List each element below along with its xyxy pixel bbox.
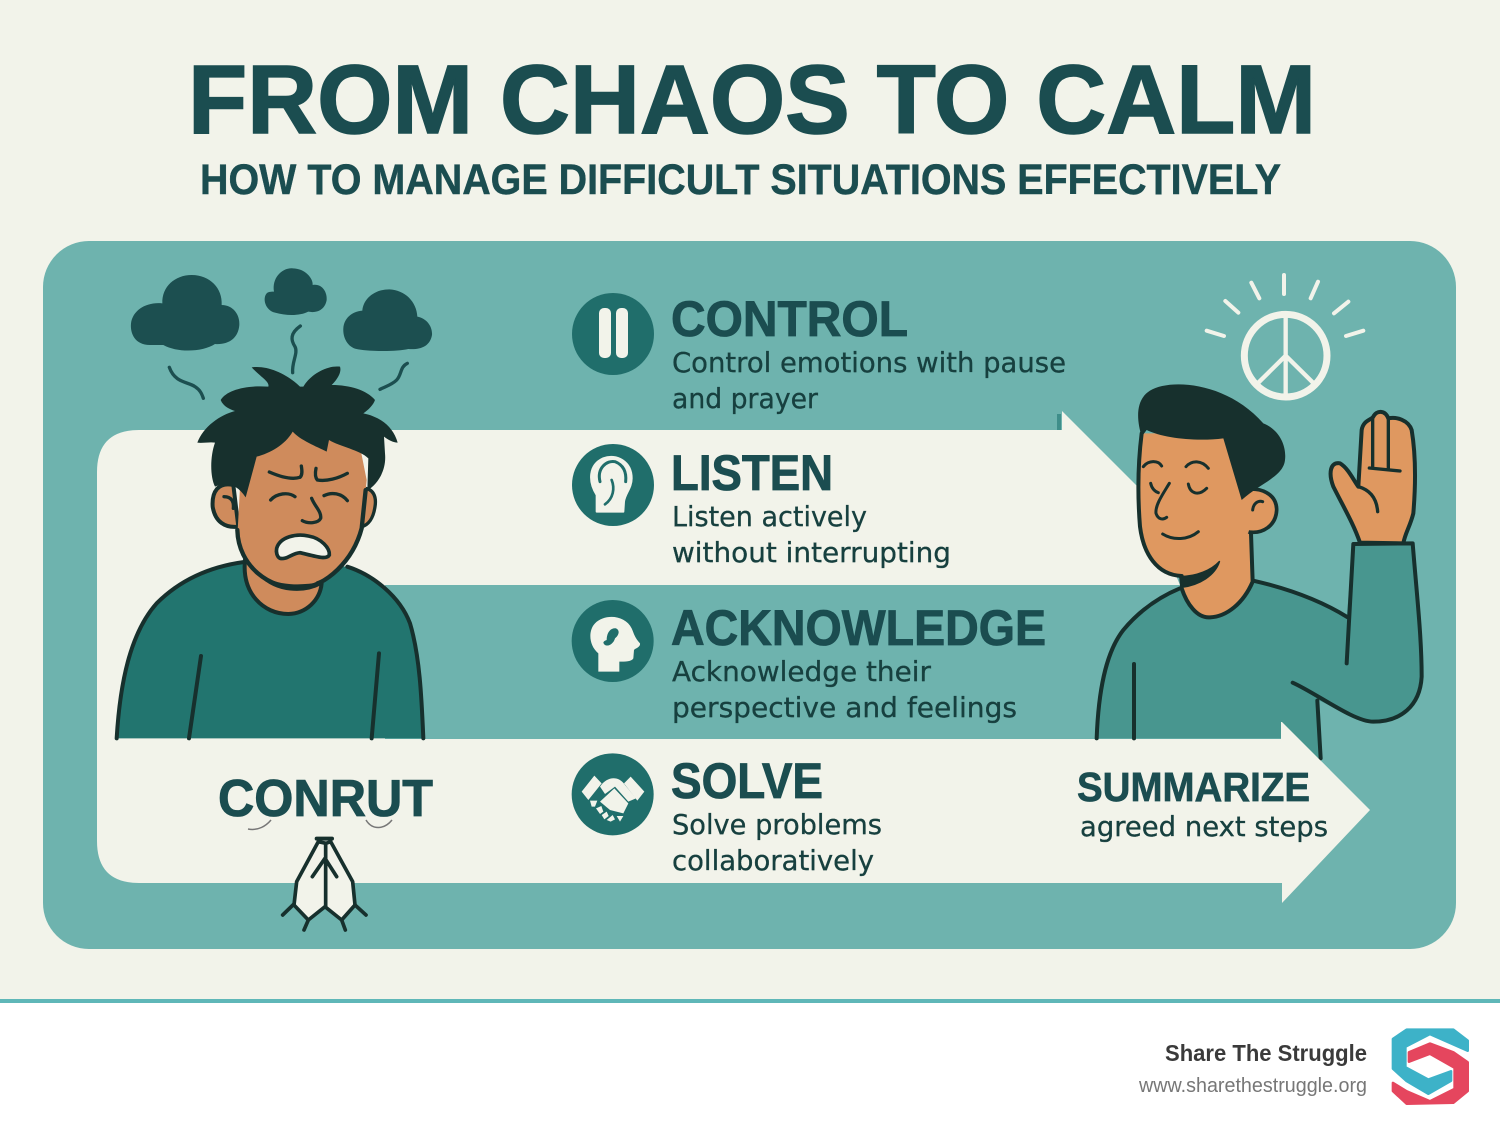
step: control	[572, 292, 1075, 415]
raised hand	[1331, 412, 1415, 543]
neck	[1180, 530, 1253, 617]
panel: teal flow background	[43, 241, 1456, 949]
squiggle stress lines	[169, 326, 407, 398]
heading: listen: LISTEN	[671, 446, 833, 501]
icon: praying hands	[283, 839, 366, 930]
description: control: and prayer	[672, 382, 818, 415]
face	[237, 430, 367, 584]
icon: pause	[572, 293, 654, 375]
face	[1138, 433, 1250, 575]
sweater	[117, 562, 423, 738]
neck	[245, 560, 322, 614]
icon: storm clouds	[131, 268, 432, 351]
icon: ear	[572, 444, 654, 526]
description: control: Control emotions with pause	[672, 346, 1066, 379]
ears	[213, 484, 238, 527]
icon: handshake	[572, 753, 654, 835]
icon: head with mind	[572, 600, 654, 682]
label: conrut: CONRUT	[218, 769, 433, 827]
title: FROM CHAOS TO CALM	[188, 45, 1316, 154]
heading: control: CONTROL	[671, 292, 908, 347]
footer	[0, 999, 1500, 1127]
label: summarize	[1077, 765, 1328, 843]
description: solve: Solve problems	[672, 808, 882, 841]
heading: acknowledge: ACKNOWLEDGE	[671, 601, 1046, 656]
open grimacing mouth	[276, 535, 329, 559]
hair	[1138, 384, 1285, 500]
step: solve	[572, 753, 891, 877]
person: calm man with raised hand	[1097, 275, 1422, 760]
description: acknowledge: Acknowledge their	[672, 655, 931, 688]
brand name: Share The Struggle	[1165, 1040, 1367, 1066]
description: listen: without interrupting	[672, 536, 951, 569]
icon: peace symbol with rays	[1207, 275, 1363, 397]
label: summarize: agreed next steps	[1080, 810, 1328, 843]
heading: solve: SOLVE	[671, 754, 823, 809]
description: listen: Listen actively	[672, 500, 867, 533]
flow path: cream winding arrow band	[97, 411, 1370, 903]
hair	[197, 366, 398, 497]
logo	[1393, 1030, 1468, 1104]
ear	[1243, 489, 1277, 532]
website: www.sharethestruggle.org	[1138, 1074, 1367, 1097]
subtitle: HOW TO MANAGE DIFFICULT SITUATIONS EFFECTIVELY	[200, 155, 1281, 203]
person: stressed man with storm clouds	[117, 268, 432, 738]
sweater and raised arm	[1097, 543, 1422, 760]
facial features	[224, 466, 347, 523]
facial features	[1143, 462, 1263, 539]
description: solve: collaboratively	[672, 844, 874, 877]
step: acknowledge	[572, 600, 1046, 724]
label: summarize: SUMMARIZE	[1077, 765, 1310, 810]
description: acknowledge: perspective and feelings	[672, 691, 1017, 724]
step: listen	[572, 444, 951, 569]
arrow head overlapping calm man	[1281, 722, 1330, 795]
